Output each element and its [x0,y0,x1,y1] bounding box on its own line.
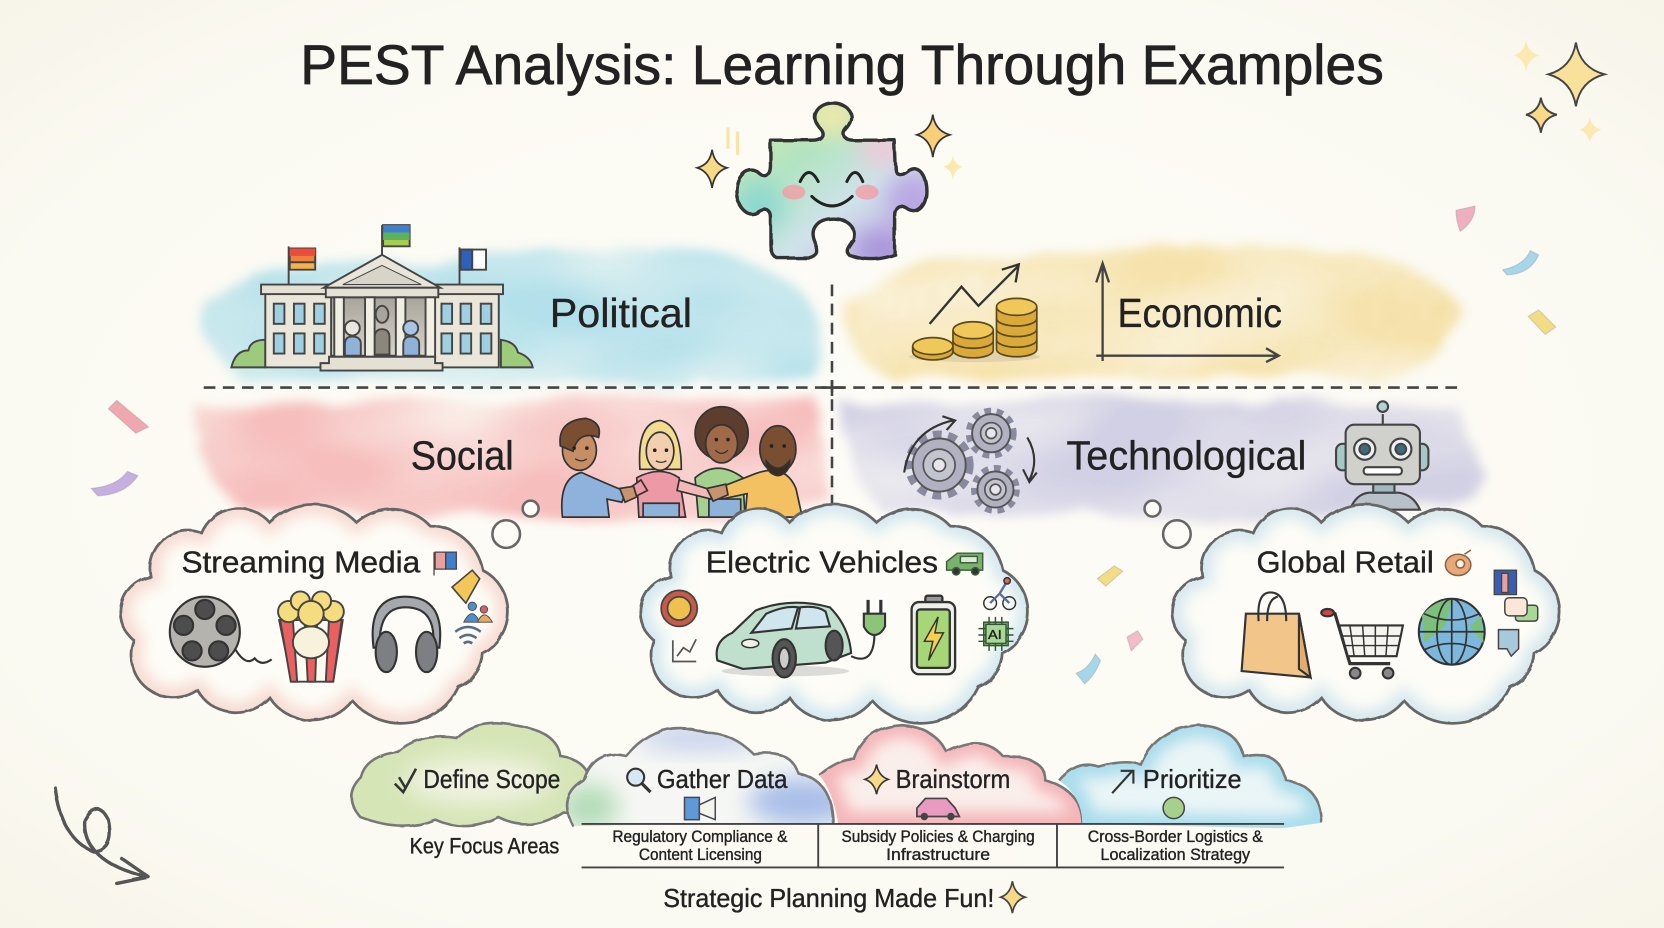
tagline: Strategic Planning Made Fun! [663,885,994,913]
icon: flag [434,552,456,575]
icon: film reel [170,597,272,667]
thought bubbles [492,501,539,548]
panel: technological [904,401,1428,510]
step: gather data: Gather Data [657,766,788,794]
icon: policy badge [661,590,697,626]
icon: electric car [717,603,851,677]
puzzle mascot [735,101,929,261]
cloud outline [1172,504,1560,723]
icon: wifi [455,627,481,643]
step: brainstorm: Brainstorm [896,766,1010,794]
icon: robot [1336,401,1428,510]
icon: flag card [1494,570,1516,595]
cell: streaming: Content Licensing [639,846,762,864]
watercolour wash: technological [844,397,1478,519]
heading: Electric Vehicles [706,544,938,579]
cell: electric vehicles: Subsidy Policies & Charging [842,828,1035,846]
cell: streaming: Regulatory Compliance & [612,828,787,846]
step: define scope: Define Scope [423,766,560,794]
key focus areas table [582,824,1284,867]
icon: headphones [373,597,440,672]
sparkles top right [1513,40,1605,142]
icon: gears with arrows [904,412,1037,510]
key focus areas label: Key Focus Areas [410,834,559,859]
label: Economic: Economic [1117,290,1282,336]
card: electric vehicles thought cloud [640,504,1028,723]
heading: Global Retail [1256,544,1434,579]
icon: globe [1419,599,1485,665]
icon: small chart [673,639,696,661]
chart axes [1096,263,1279,362]
icon: coins with rising arrow [908,264,1040,362]
cell: streaming [612,828,787,864]
icon: food [1445,550,1471,575]
icon: audience [464,602,492,622]
puzzle cheeks [782,185,879,200]
watercolour wash: political [200,248,826,384]
puzzle colour fill [738,104,926,258]
cell: global retail [1088,828,1263,864]
thought bubbles [1145,501,1191,548]
watercolour wash: social [195,397,826,520]
AI chip label: AI [988,627,1002,642]
watercolour wash: economic [848,245,1462,378]
quadrant divider lines [204,285,1459,504]
icon: charging plug [851,600,885,659]
label: Technological: Technological [1067,432,1306,478]
puzzle outline [736,103,926,259]
step: prioritize: Prioritize [1143,766,1242,794]
icon: government building [231,225,533,371]
icon: cyclist [984,578,1016,609]
cloud outline [120,504,508,723]
icon: AI chip [978,617,1013,651]
card: global retail thought cloud [1145,501,1560,723]
icon: shopping bag [1242,592,1311,677]
cell: global retail: Cross-Border Logistics & [1088,828,1263,846]
swirl arrow [55,788,149,883]
label: Social: Social [411,432,514,478]
icon: shopping cart [1321,609,1403,678]
puzzle face [800,173,863,206]
cloud outline [640,504,1028,723]
icon: blue message [1498,630,1519,656]
cell: electric vehicles [842,828,1035,864]
icon: popcorn [278,591,344,682]
icon: price tag [452,570,480,603]
label: Political: Political [550,290,692,336]
step: prioritize [1059,725,1321,828]
icon: battery [912,596,955,674]
cell: electric vehicles: Infrastructure [886,846,990,864]
table rules [582,824,1284,867]
process row: four step clouds [351,723,1321,830]
panel: economic [908,263,1282,362]
cell: global retail: Localization Strategy [1100,846,1251,864]
step: define scope [351,723,594,826]
sparkles around puzzle [697,115,963,188]
icon: green van [947,553,983,575]
heading: Streaming Media [181,544,421,579]
title: PEST Analysis: Learning Through Examples [300,34,1384,96]
icon: chat bubbles [1505,598,1538,621]
panel: social [411,407,802,517]
step: brainstorm [819,725,1082,824]
step: gather data [566,726,835,827]
card: streaming media thought cloud [120,501,539,723]
panel: political [231,225,692,371]
confetti [91,206,1556,684]
icon: four people shaking hands [560,407,802,517]
